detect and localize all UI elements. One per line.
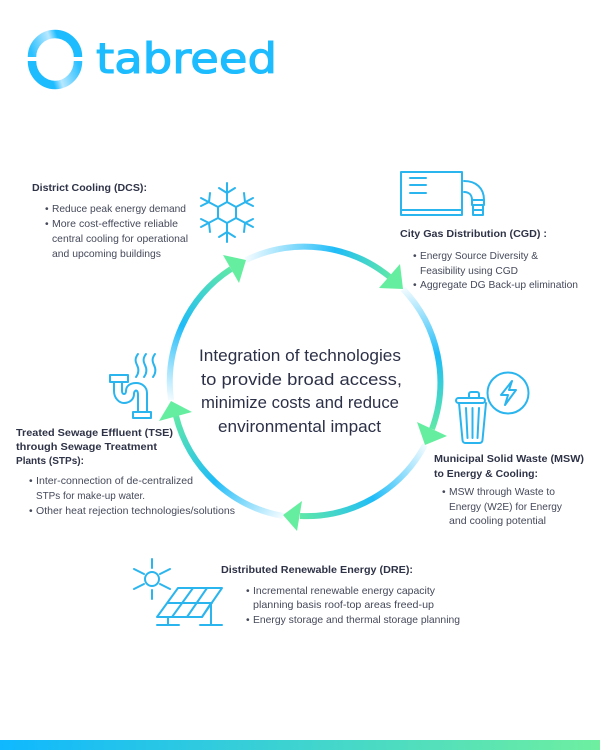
text: Municipal Solid Waste: MSW through Waste to xyxy=(449,487,555,498)
text: City Gas Distribution xyxy=(400,228,578,291)
logo ring mark xyxy=(32,34,78,85)
icon: gas unit with pipe xyxy=(401,172,484,215)
center statement: environmental impact xyxy=(218,417,381,436)
text: Municipal Solid Waste: to Energy & Cooling: xyxy=(434,468,538,480)
text: Municipal Solid Waste: Municipal Solid Waste (MSW) xyxy=(434,453,584,465)
text: City Gas Distribution: Feasibility using CGD xyxy=(420,266,518,277)
text: Treated Sewage Effluent xyxy=(16,427,235,517)
text: District Cooling: More cost-effective reliable xyxy=(52,219,178,230)
arrow: MSW to DRE xyxy=(283,445,425,531)
text: Municipal Solid Waste: • xyxy=(442,487,446,498)
text: Municipal Solid Waste: and cooling potential xyxy=(449,516,546,527)
center statement: Integration of technologies xyxy=(199,346,401,365)
text: District Cooling: • xyxy=(45,219,49,230)
text: Treated Sewage Effluent: through Sewage Treatment xyxy=(16,441,158,453)
text: District Cooling: and upcoming buildings xyxy=(52,249,161,260)
text: Treated Sewage Effluent: Inter-connection of de-centralized xyxy=(36,476,193,487)
text: Distributed Renewable Energy xyxy=(221,564,460,626)
text: Distributed Renewable Energy: Distributed Renewable Energy (DRE): xyxy=(221,564,413,576)
text: City Gas Distribution: Aggregate DG Back-up elimination xyxy=(420,280,578,291)
text: City Gas Distribution: Energy Source Diversity & xyxy=(420,251,538,262)
logo wordmark: tabreed xyxy=(96,34,277,83)
footer gradient bar xyxy=(0,740,600,750)
text: Distributed Renewable Energy: planning basis roof-top areas freed-up xyxy=(253,600,434,611)
text: Treated Sewage Effluent: • xyxy=(29,506,33,517)
arrow: CGD to MSW xyxy=(403,289,447,445)
text: Treated Sewage Effluent: Plants (STPs): xyxy=(16,455,84,467)
text: District Cooling: • xyxy=(45,204,49,215)
icon: trash bin with energy bolt xyxy=(456,372,528,443)
text: Distributed Renewable Energy: • xyxy=(246,586,250,597)
text: District Cooling: District Cooling (DCS): xyxy=(32,182,147,194)
icon: snowflake xyxy=(201,183,253,242)
text: District Cooling xyxy=(32,182,188,260)
text: Municipal Solid Waste: Energy (W2E) for Energy xyxy=(449,502,563,513)
text: District Cooling: Reduce peak energy demand xyxy=(52,204,186,215)
text: Distributed Renewable Energy: Incremental renewable energy capacity xyxy=(253,586,436,597)
text: Treated Sewage Effluent: • xyxy=(29,476,33,487)
text: City Gas Distribution: City Gas Distribution (CGD) : xyxy=(400,228,547,240)
icon: sun and solar panel xyxy=(134,559,222,625)
text: Treated Sewage Effluent: STPs for make-up water. xyxy=(36,491,145,502)
center statement: to provide broad access, xyxy=(201,370,402,389)
text: Treated Sewage Effluent: Other heat rejection technologies/solutions xyxy=(36,506,235,517)
text: City Gas Distribution: • xyxy=(413,280,417,291)
icon: sewage pipe with heat waves xyxy=(110,354,155,418)
arrow: DRE to TSE xyxy=(159,401,283,516)
circular arrow cycle xyxy=(159,247,447,531)
text: Distributed Renewable Energy: • xyxy=(246,615,250,626)
text: City Gas Distribution: • xyxy=(413,251,417,262)
center statement: minimize costs and reduce xyxy=(201,393,399,412)
arrow: TSE to DCS xyxy=(170,255,246,400)
text: Municipal Solid Waste xyxy=(434,453,584,527)
logo: tabreed xyxy=(32,34,277,85)
text: Distributed Renewable Energy: Energy storage and thermal storage planning xyxy=(253,615,460,626)
text: Treated Sewage Effluent: Treated Sewage Effluent (TSE) xyxy=(16,427,173,439)
arrow: DCS to CGD xyxy=(246,247,403,289)
center statement xyxy=(199,346,402,436)
text: District Cooling: central cooling for operational xyxy=(52,234,188,245)
